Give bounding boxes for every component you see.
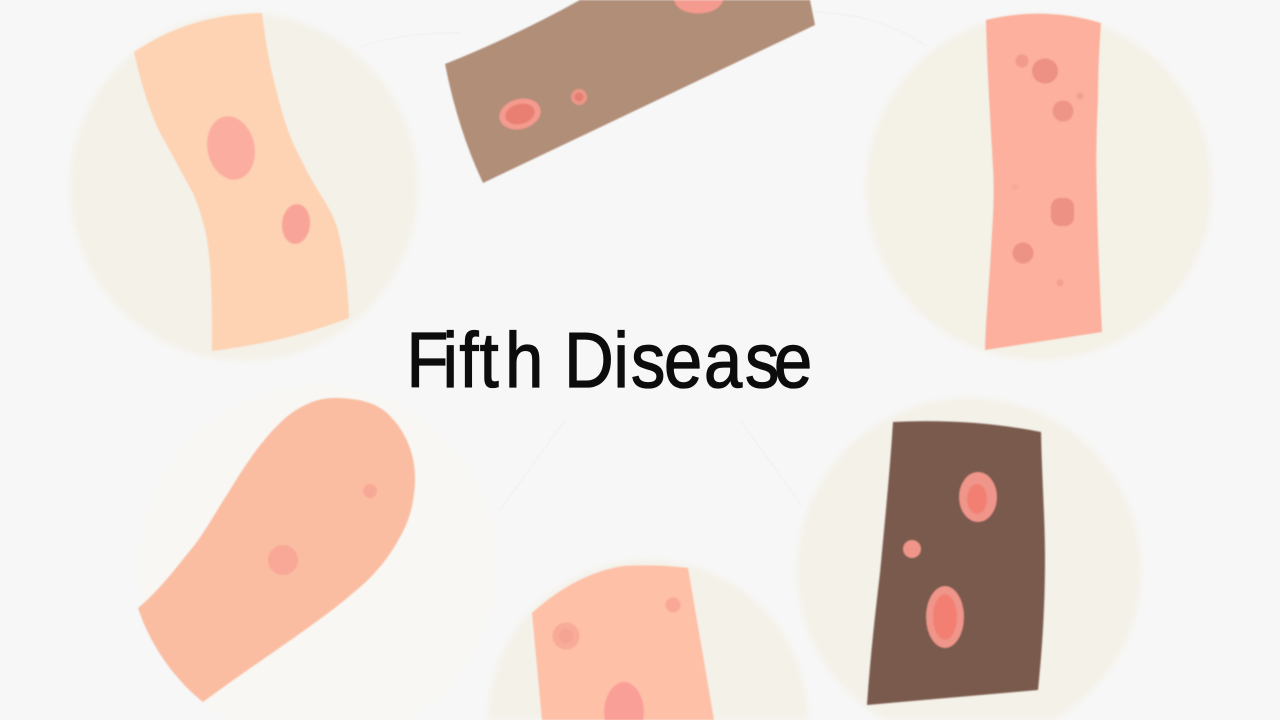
- panel: rounded limb, lower left: [138, 387, 496, 720]
- rash spot, bottom: [926, 586, 964, 648]
- arm: [134, 13, 349, 351]
- panel: peach skin, bottom centre: [488, 560, 808, 720]
- panel: dark skin patch, lower right: [797, 398, 1141, 720]
- title: Fifth Disease: [407, 316, 812, 404]
- arm: [445, 0, 815, 183]
- rash spot, small: [571, 89, 587, 105]
- arm: [985, 14, 1102, 350]
- rash spot, large: [201, 112, 261, 184]
- panel: tan skin arm, top centre: [445, 0, 815, 183]
- limb: [138, 398, 415, 702]
- rash spot, top: [674, 0, 723, 13]
- rash spots: [1012, 54, 1084, 286]
- rash spot, small: [363, 484, 377, 498]
- rash spot, large: [268, 545, 298, 575]
- rash spot, bottom: [604, 682, 644, 720]
- rash spot, small: [280, 203, 312, 245]
- skin patch: [867, 421, 1045, 705]
- rash spot, top: [959, 472, 997, 522]
- rash spot, right: [666, 598, 680, 612]
- rash spot, left: [552, 622, 580, 650]
- panel: pink skin arm, top right: [866, 14, 1212, 360]
- circle backdrop: [140, 387, 496, 720]
- circle backdrop: [70, 13, 418, 361]
- skin patch: [532, 565, 714, 720]
- circle backdrop: [797, 398, 1141, 720]
- circle backdrop: [488, 560, 808, 720]
- rash spot, small: [903, 540, 921, 558]
- rash spot, left: [496, 94, 544, 134]
- circle backdrop: [866, 14, 1212, 360]
- panel: light skin arm, top left: [70, 13, 418, 361]
